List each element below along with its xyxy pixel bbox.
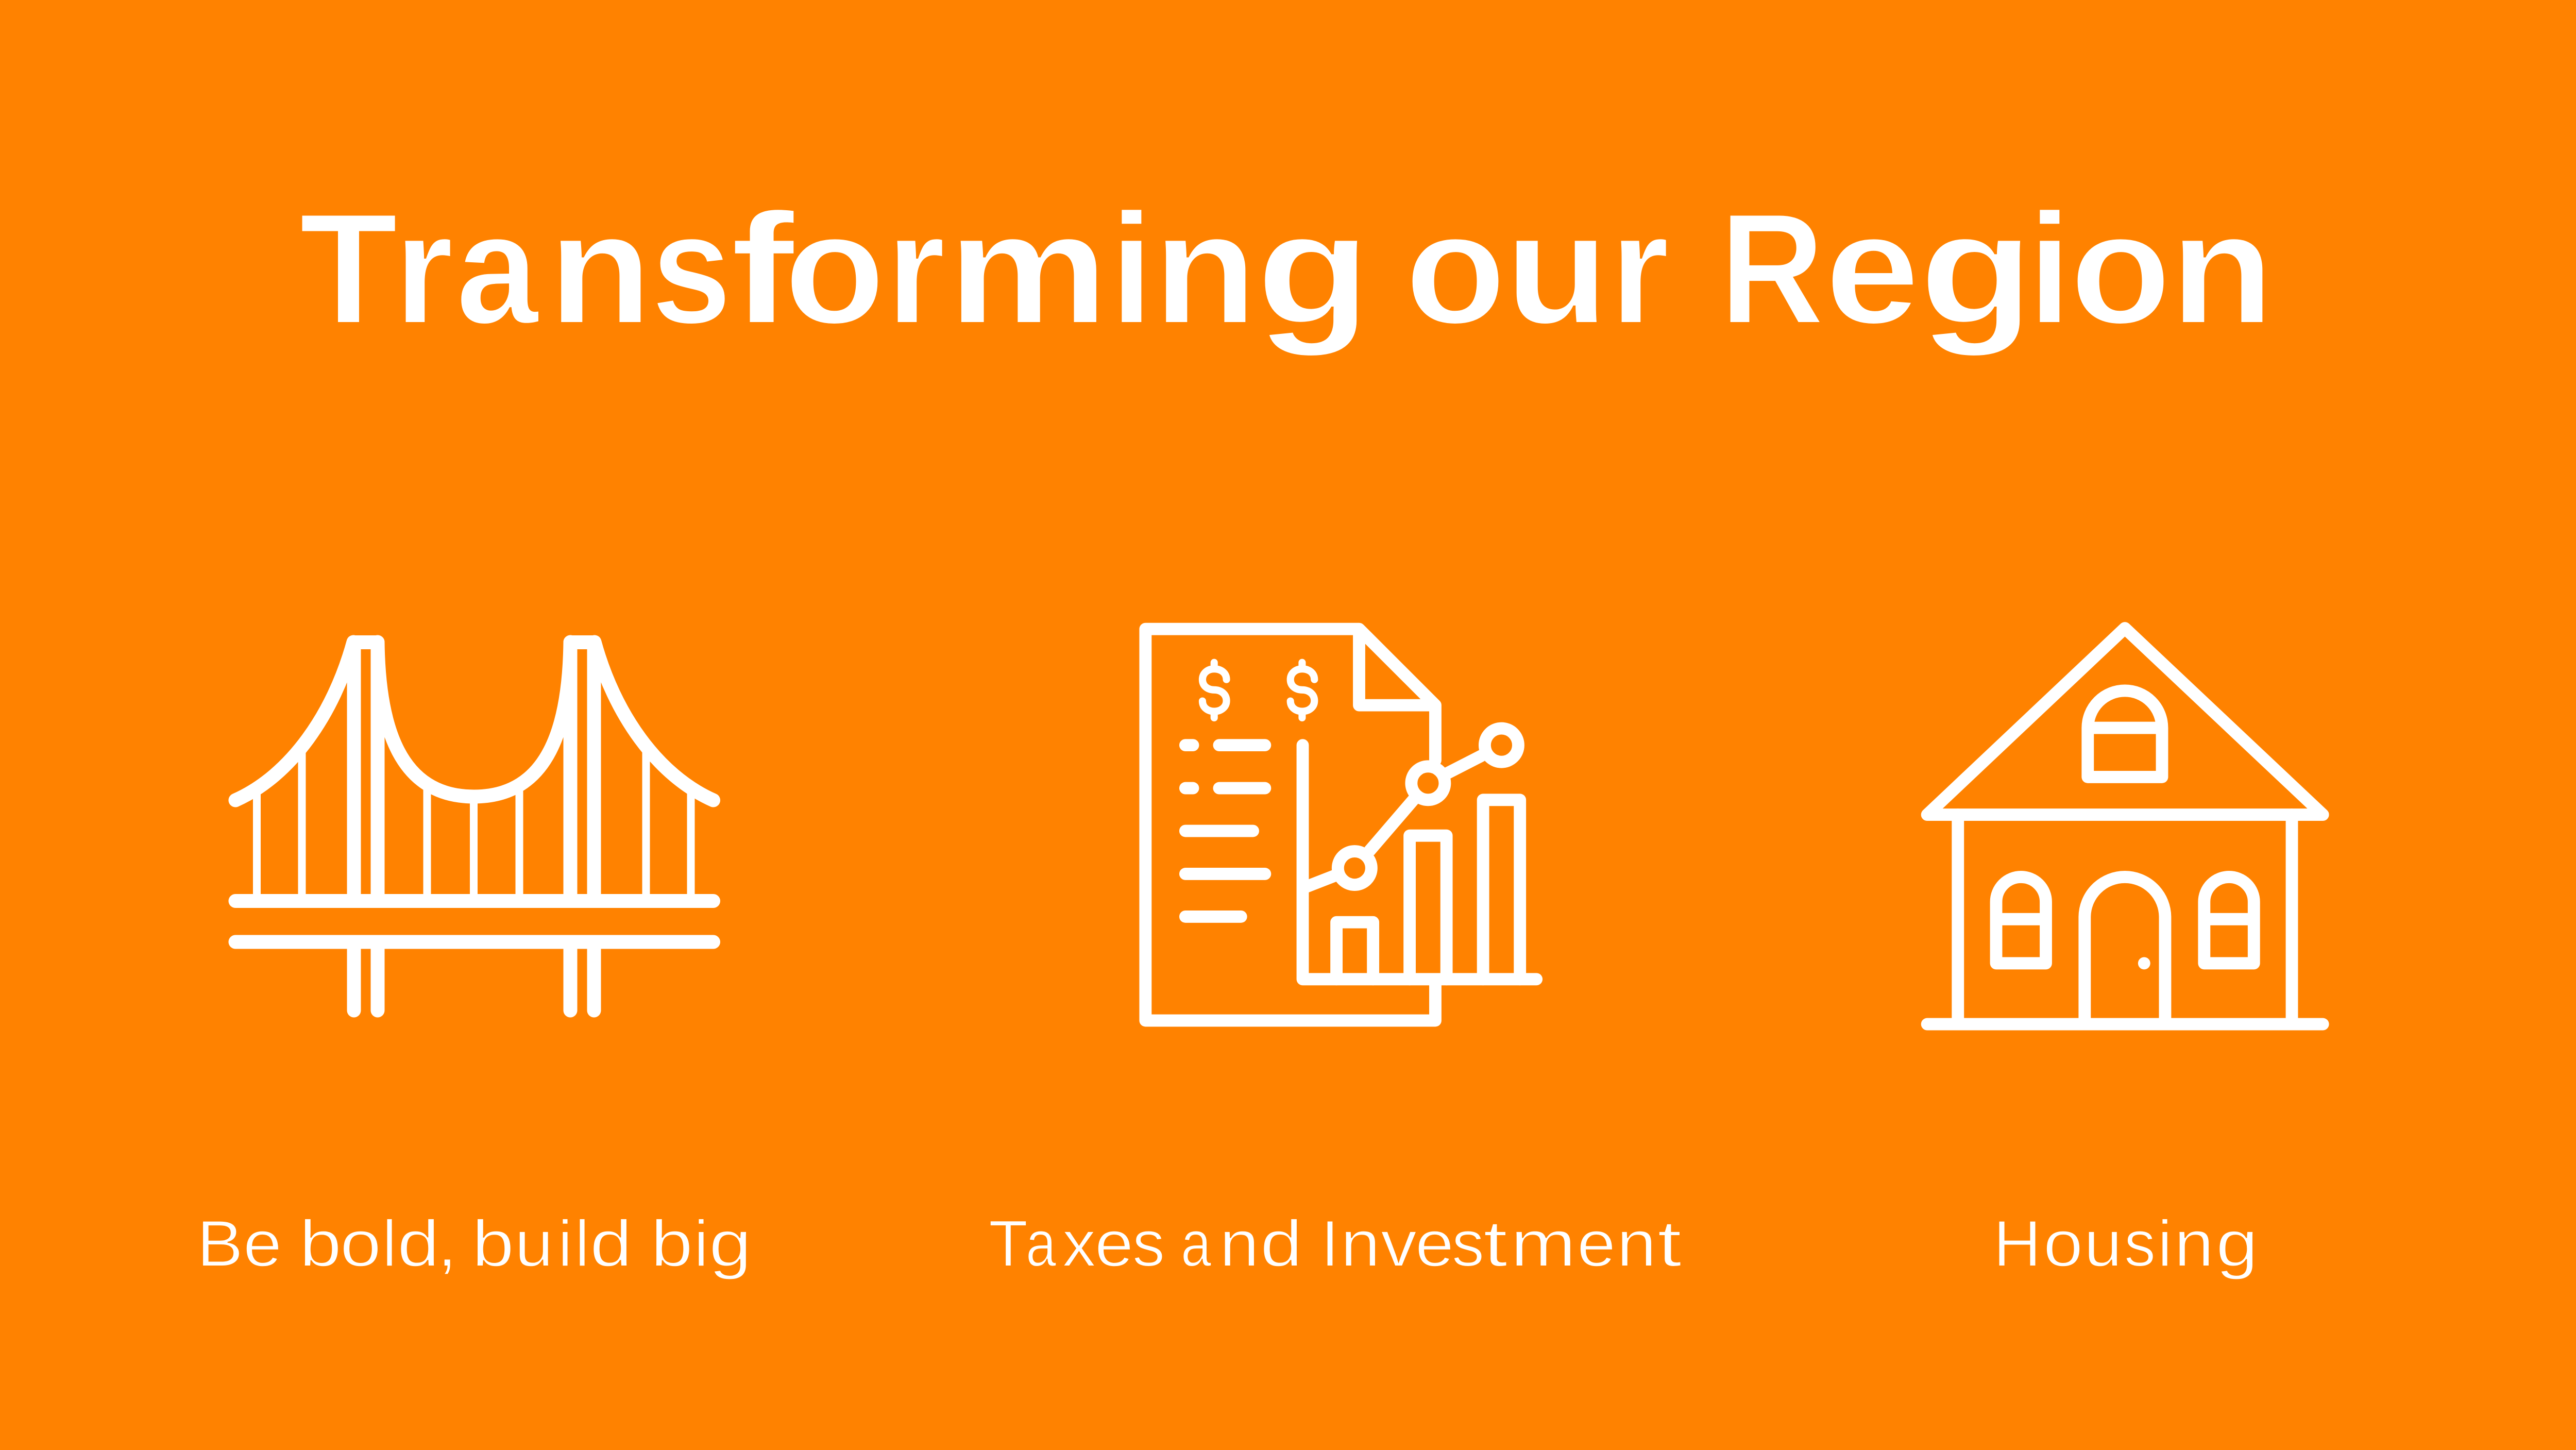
title: r	[1610, 180, 1669, 357]
label: housing: o	[2043, 1207, 2083, 1280]
title: n	[2170, 180, 2274, 357]
chart bars	[1336, 800, 1520, 979]
label: be bold: i	[694, 1207, 708, 1280]
label: be bold: e	[243, 1207, 282, 1280]
title: i	[2028, 180, 2072, 357]
label: be bold: b	[299, 1207, 342, 1280]
label: taxes and investment: e	[1577, 1207, 1616, 1280]
title: s	[651, 180, 732, 357]
label: taxes and investment: n	[1219, 1207, 1259, 1280]
right window	[2204, 877, 2254, 963]
title: f	[731, 180, 796, 357]
title: a	[456, 180, 539, 357]
attic window	[2088, 690, 2162, 777]
label: be bold: B	[197, 1207, 243, 1280]
label: be bold: d	[590, 1207, 632, 1280]
walls and ground	[1927, 815, 2323, 1024]
label: taxes and investment: t	[1483, 1207, 1507, 1280]
title: g	[1919, 180, 2034, 358]
title: R	[1720, 180, 1824, 357]
label: taxes and investment: e	[1095, 1207, 1133, 1280]
label: be bold: l	[575, 1207, 589, 1280]
document outline	[1145, 629, 1435, 1021]
label: taxes and investment: s	[1452, 1207, 1484, 1280]
door	[2084, 877, 2165, 1024]
label: taxes and investment: x	[1062, 1207, 1096, 1280]
label: be bold: i	[558, 1207, 572, 1280]
icon: house	[1927, 628, 2323, 1024]
title: r	[394, 180, 453, 357]
chart trend line	[1303, 729, 1518, 888]
label: taxes and investment: a	[1026, 1207, 1056, 1280]
text lines	[1185, 745, 1265, 917]
title: T	[299, 180, 398, 357]
label: be bold: ,	[437, 1207, 457, 1280]
title: i	[1110, 180, 1154, 357]
title: m	[947, 180, 1109, 357]
bridge towers	[354, 642, 594, 1010]
label: taxes and investment: v	[1381, 1207, 1417, 1280]
label: housing: H	[1993, 1207, 2041, 1280]
door knob	[2138, 957, 2150, 969]
bridge decks	[235, 901, 713, 942]
roof	[1927, 628, 2323, 815]
bridge cables	[235, 642, 713, 800]
label: taxes and investment: m	[1511, 1207, 1576, 1280]
label: be bold: b	[651, 1207, 693, 1280]
title: o	[784, 180, 885, 357]
title: n	[1153, 180, 1257, 357]
label: taxes and investment: a	[1181, 1207, 1211, 1280]
label: taxes and investment: e	[1415, 1207, 1454, 1280]
dollar signs	[1202, 663, 1314, 718]
title: u	[1505, 180, 1609, 357]
label: housing: g	[2216, 1207, 2258, 1280]
label: housing: u	[2084, 1207, 2122, 1280]
label: housing: n	[2174, 1207, 2214, 1280]
label: be bold: g	[709, 1207, 752, 1280]
label: taxes and investment: I	[1321, 1207, 1339, 1280]
label: be bold: u	[515, 1207, 553, 1280]
label: taxes and investment: d	[1260, 1207, 1302, 1280]
label: taxes and investment: n	[1341, 1207, 1380, 1280]
bridge hangers	[257, 747, 691, 901]
title: o	[1405, 180, 1506, 357]
label: housing: s	[2124, 1207, 2156, 1280]
label: taxes and investment: t	[1657, 1207, 1682, 1280]
label: be bold: o	[340, 1207, 381, 1280]
title: g	[1256, 180, 1371, 358]
label: taxes and investment: n	[1617, 1207, 1656, 1280]
left window	[1996, 877, 2046, 963]
icon: tax document with chart	[1145, 629, 1536, 1021]
label: taxes and investment: s	[1132, 1207, 1165, 1280]
icon: suspension bridge	[235, 642, 713, 1010]
label: taxes and investment: T	[989, 1207, 1028, 1280]
title: r	[886, 180, 945, 357]
title: o	[2070, 180, 2171, 357]
label: be bold: d	[397, 1207, 439, 1280]
label: housing: i	[2158, 1207, 2172, 1280]
title: n	[548, 180, 652, 357]
label: be bold: b	[472, 1207, 514, 1280]
label: be bold: l	[382, 1207, 397, 1280]
title: e	[1825, 180, 1920, 357]
chart axes	[1303, 745, 1536, 979]
